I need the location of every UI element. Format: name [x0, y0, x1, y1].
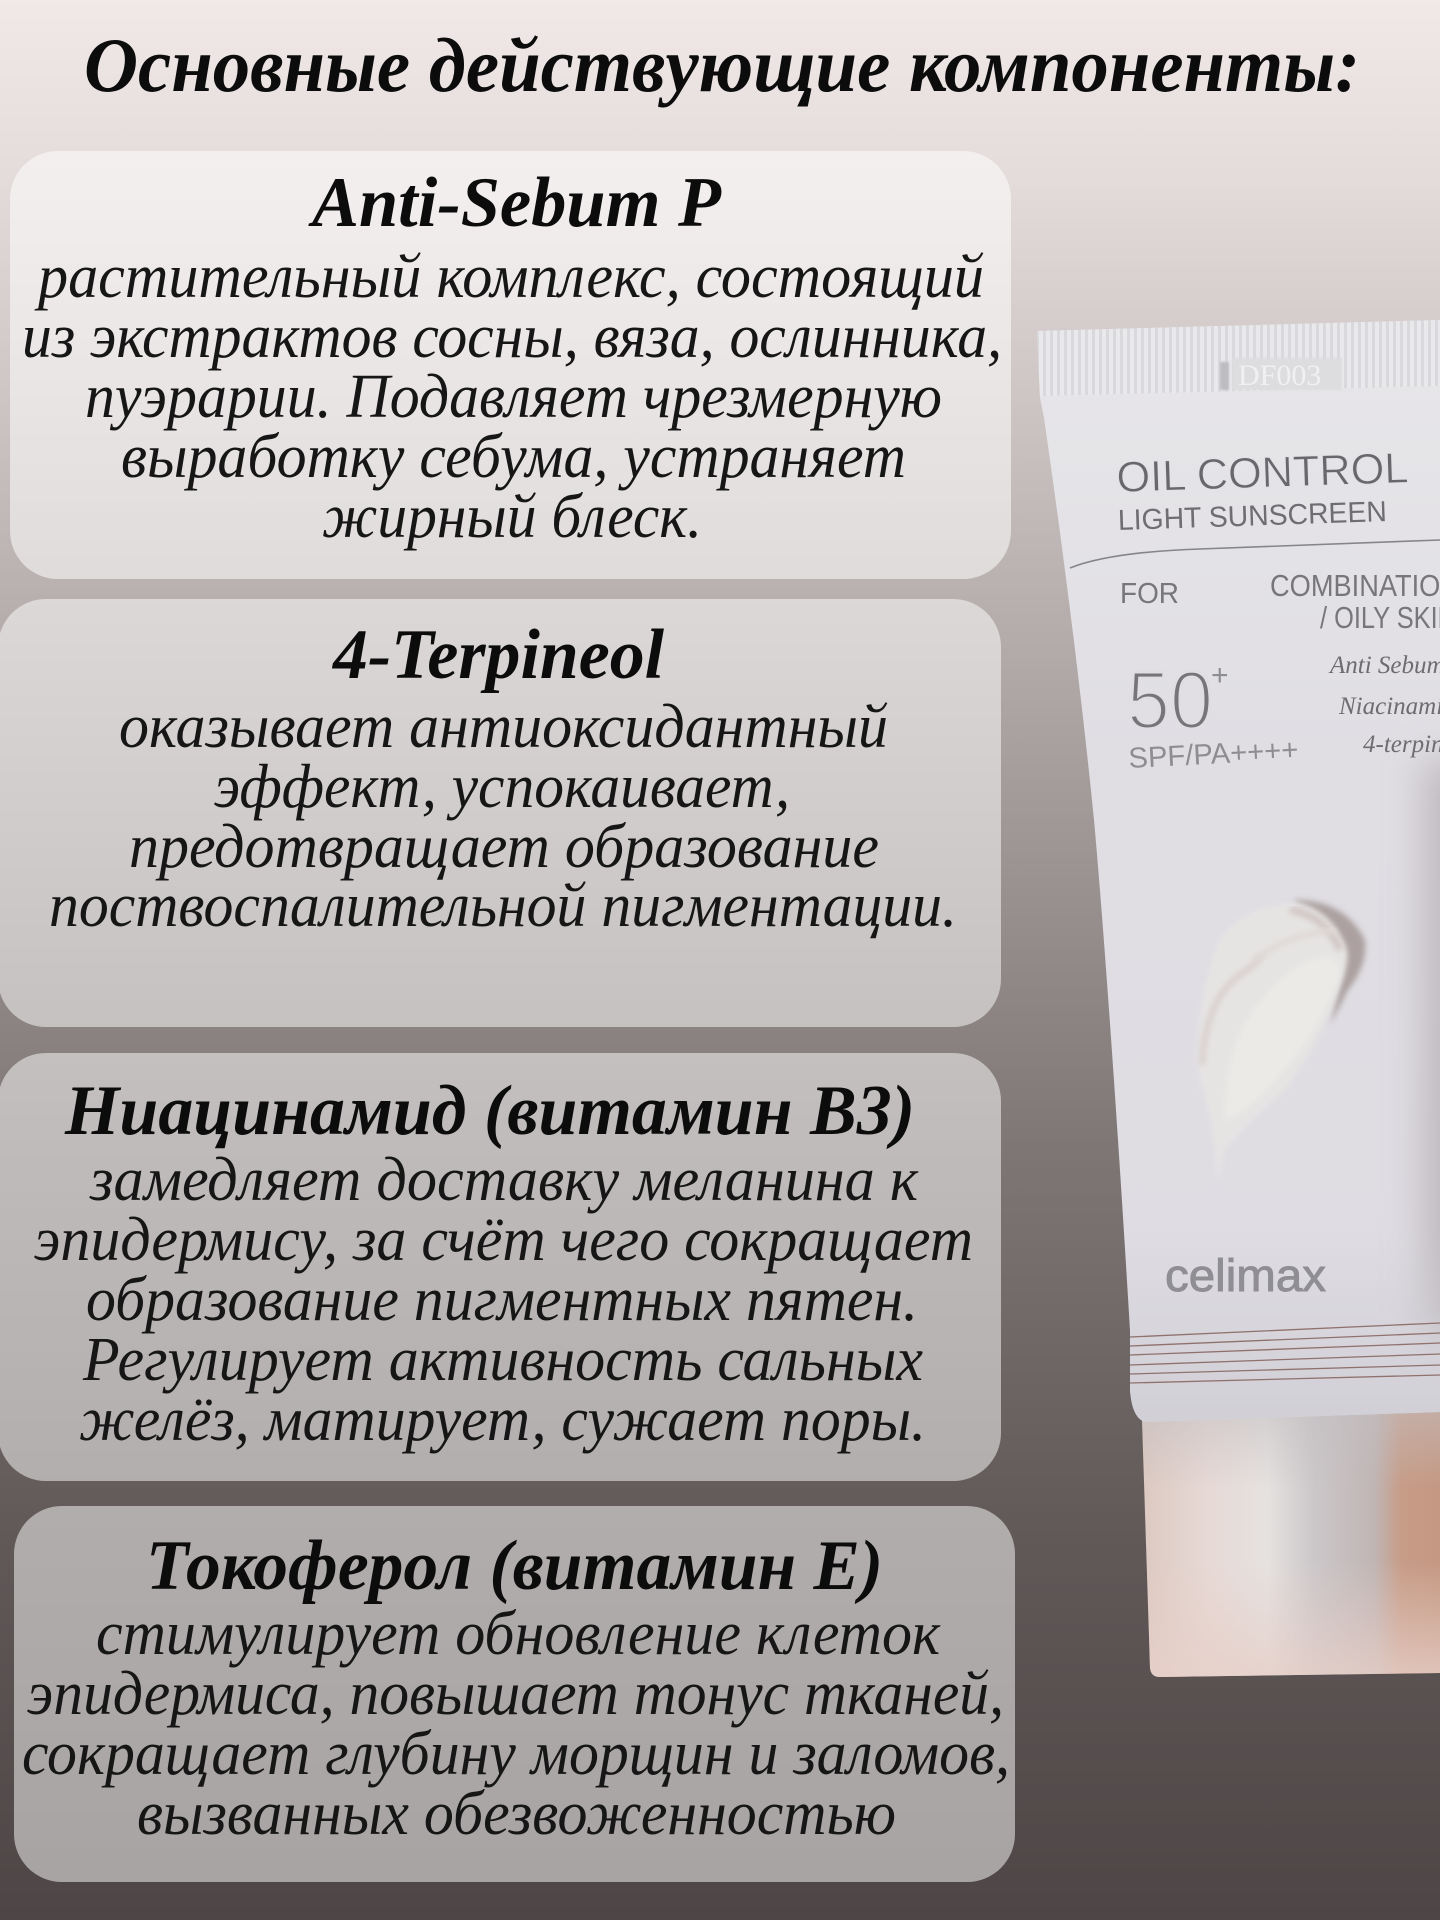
body text: из экстрактов сосны, вяза, ослинника,	[22, 303, 1002, 371]
panel background	[10, 151, 1011, 579]
body text	[34, 1146, 973, 1454]
body text: Регулирует активность сальных	[82, 1326, 923, 1394]
body text: пуэрарии. Подавляет чрезмерную	[85, 363, 942, 431]
body text: предотвращает образование	[129, 813, 879, 881]
tube crimp with ribs	[1037, 320, 1440, 396]
product name	[1116, 444, 1410, 537]
panel background	[14, 1506, 1015, 1882]
body text: эпидермису, за счёт чего сокращает	[34, 1206, 973, 1274]
ingredients on tube	[1328, 652, 1440, 758]
tube crimp with ribs: DF003	[1238, 359, 1321, 392]
panel: Tocopherol	[14, 1506, 1015, 1882]
tube cap	[1142, 1410, 1440, 1677]
body text: замедляет доставку меланина к	[89, 1146, 919, 1214]
cream smear	[1197, 900, 1365, 1183]
tube body	[1037, 320, 1440, 1425]
product name: OIL CONTROL	[1116, 444, 1409, 502]
body text: стимулирует обновление клеток	[96, 1600, 941, 1668]
body text: эпидермиса, повышает тонус тканей,	[27, 1660, 1004, 1728]
skin type text	[1120, 568, 1440, 635]
SPF rating: +	[1211, 659, 1229, 692]
body text: сокращает глубину морщин и заломов,	[22, 1720, 1010, 1788]
SPF rating: 50	[1127, 655, 1213, 746]
body text	[22, 1600, 1010, 1848]
heading: Ниацинамид (витамин В3)	[64, 1072, 915, 1150]
heading: Anti-Sebum P	[308, 164, 722, 242]
body text: вызванных обезвоженностью	[137, 1780, 896, 1848]
panel: Anti-Sebum P	[10, 151, 1011, 579]
body text: выработку себума, устраняет	[121, 423, 906, 491]
body text: поствоспалительной пигментации.	[49, 872, 957, 940]
heading: Токоферол (витамин Е)	[146, 1527, 883, 1605]
panel background	[0, 599, 1001, 1027]
panel background	[0, 1053, 1001, 1481]
body text: образование пигментных пятен.	[86, 1266, 918, 1334]
SPF rating	[1127, 655, 1299, 775]
skin type text: FOR	[1120, 578, 1179, 610]
body text	[22, 243, 1002, 551]
SPF rating: SPF/PA++++	[1128, 734, 1299, 775]
panel: Niacinamide	[0, 1053, 1001, 1481]
panel: 4-Terpineol	[0, 599, 1001, 1027]
product name: LIGHT SUNSCREEN	[1117, 496, 1387, 537]
body text: эффект, успокаивает,	[214, 753, 790, 821]
decorative stripes	[1130, 1323, 1440, 1383]
body text: желёз, матирует, сужает поры.	[79, 1386, 926, 1454]
heading: 4-Terpineol	[331, 616, 664, 694]
divider line	[1070, 540, 1440, 568]
brand name: celimax	[1165, 1250, 1327, 1301]
body text: оказывает антиоксидантный	[119, 693, 888, 761]
body text: растительный комплекс, состоящий	[34, 243, 984, 311]
body text	[49, 693, 957, 940]
body text: жирный блеск.	[322, 483, 702, 551]
product image: sunscreen tube	[1037, 320, 1440, 1677]
title: Основные действующие компоненты:	[84, 22, 1360, 108]
